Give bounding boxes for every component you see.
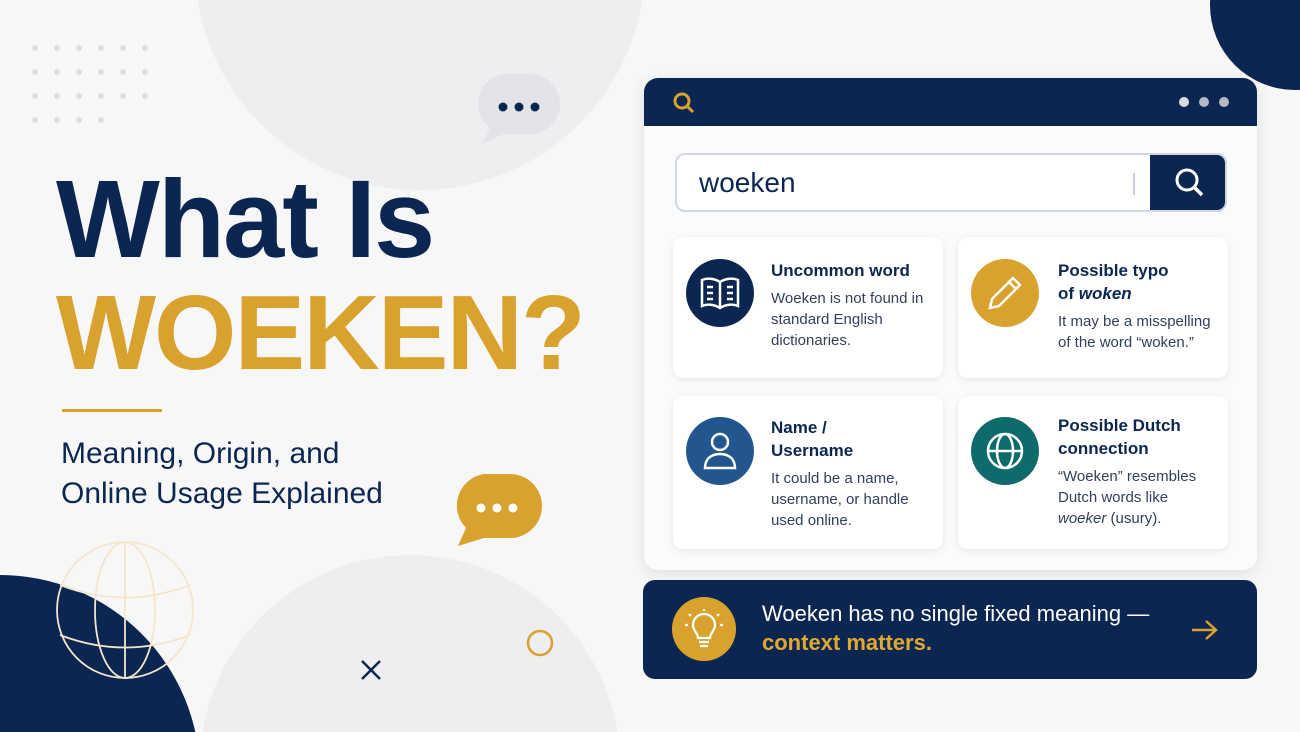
card: dutch connection: “Woeken” resembles Dutch words like woeker (usury). xyxy=(1058,468,1196,527)
icon: grey chat bubble xyxy=(478,74,560,144)
card: uncommon word: Woeken is not found in standard English dictionaries. xyxy=(771,290,923,349)
card: possible typo: Possible typo xyxy=(1058,261,1169,280)
card: dutch connection xyxy=(958,396,1228,549)
icon: gold chat bubble xyxy=(456,474,542,546)
icon: lightbulb xyxy=(672,597,736,661)
subtitle: Meaning, Origin, and xyxy=(61,437,340,470)
callout banner: context matters. xyxy=(762,630,932,655)
panel: browser window xyxy=(644,78,1257,570)
card: dutch connection: Possible Dutch xyxy=(1058,416,1181,435)
subtitle xyxy=(61,437,383,510)
search bar xyxy=(675,153,1227,212)
card: name / username: Name / xyxy=(771,418,827,437)
card: possible typo: It may be a misspelling of the word “woken.” xyxy=(1058,313,1211,351)
callout banner: Woeken has no single fixed meaning — xyxy=(762,601,1149,626)
icon: x mark xyxy=(361,660,381,680)
browser header xyxy=(644,78,1257,126)
card: uncommon word: Uncommon word xyxy=(771,261,910,280)
card: uncommon word xyxy=(673,237,943,378)
icon: ring xyxy=(526,630,554,656)
card: dutch connection: connection xyxy=(1058,439,1149,458)
icon: arrow xyxy=(1192,620,1218,640)
card: name / username: It could be a name, username, or handle used online. xyxy=(771,470,909,529)
callout banner xyxy=(643,580,1257,679)
title accent: WOEKEN? xyxy=(56,274,584,392)
title: What Is xyxy=(56,158,433,281)
card: name / username xyxy=(673,396,943,549)
card: possible typo: of woken xyxy=(1058,284,1132,303)
card: possible typo xyxy=(958,237,1228,378)
divider xyxy=(62,409,162,412)
card: name / username: Username xyxy=(771,441,853,460)
search bar: woeken xyxy=(699,167,796,198)
subtitle: Online Usage Explained xyxy=(61,477,383,510)
